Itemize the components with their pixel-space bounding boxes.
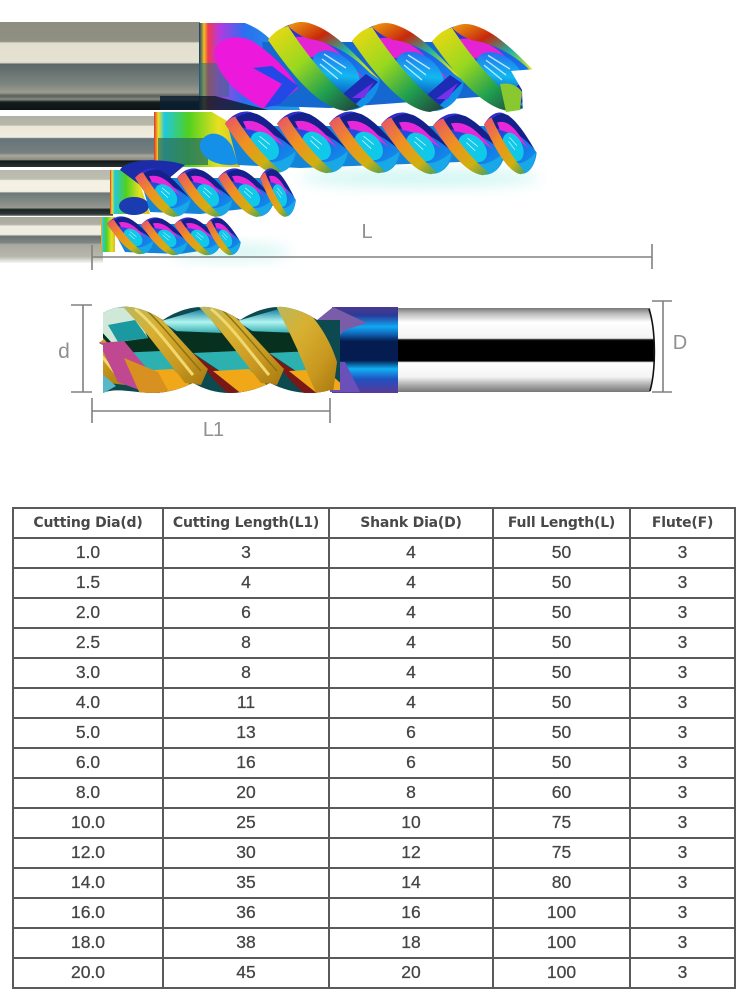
table row 2.0: 50 <box>552 602 571 622</box>
table row 1.5: 4 <box>241 572 251 592</box>
table row 14.0: 35 <box>236 872 256 892</box>
dimension L1: L1 <box>203 419 224 441</box>
tool 3: small end mill <box>0 160 296 217</box>
table row 3.0: 8 <box>241 662 251 682</box>
table row 5.0: 6 <box>406 722 416 742</box>
table row 2.5: 4 <box>406 632 416 652</box>
table row 5.0 <box>76 722 687 742</box>
table row 5.0: 5.0 <box>76 722 100 742</box>
table row 4.0 <box>76 692 687 712</box>
table row 5.0: 13 <box>236 722 256 742</box>
table header: Full Length(L) <box>508 515 615 531</box>
table row 14.0: 14.0 <box>71 872 105 892</box>
table header: Shank Dia(D) <box>360 515 462 531</box>
table row 16.0: 3 <box>678 902 687 922</box>
table row 16.0 <box>71 902 687 922</box>
table row 1.5: 1.5 <box>76 572 100 592</box>
table row 12.0: 30 <box>236 842 256 862</box>
table row 6.0 <box>76 752 687 772</box>
table row 18.0: 3 <box>678 932 687 952</box>
table row 2.0: 4 <box>406 602 416 622</box>
table row 20.0: 100 <box>547 962 576 982</box>
table row 6.0: 50 <box>552 752 571 772</box>
dimension L: L <box>361 221 373 243</box>
table row 2.5: 8 <box>241 632 251 652</box>
table header: Cutting Length(L1) <box>173 515 319 531</box>
lower end mill diagram <box>99 306 656 393</box>
table row 12.0 <box>71 842 687 862</box>
table row 6.0: 6 <box>406 752 416 772</box>
dimension d <box>58 305 92 392</box>
table row 3.0 <box>76 662 687 682</box>
table row 1.0: 3 <box>678 542 687 562</box>
table row 12.0: 75 <box>552 842 571 862</box>
table row 1.0: 4 <box>406 542 416 562</box>
table row 12.0: 12.0 <box>71 842 105 862</box>
table header <box>33 515 713 982</box>
table row 2.0: 2.0 <box>76 602 100 622</box>
table row 14.0: 3 <box>678 872 687 892</box>
table row 20.0: 20.0 <box>71 962 105 982</box>
table row 4.0: 4 <box>406 692 416 712</box>
table row 12.0: 3 <box>678 842 687 862</box>
table row 1.0: 1.0 <box>76 542 100 562</box>
dimension D <box>652 301 687 392</box>
table row 1.0: 50 <box>552 542 571 562</box>
table row 4.0: 50 <box>552 692 571 712</box>
table row 16.0: 100 <box>547 902 576 922</box>
table row 10.0 <box>71 812 687 832</box>
table row 8.0: 8.0 <box>76 782 100 802</box>
table row 18.0: 100 <box>547 932 576 952</box>
table row 8.0: 8 <box>406 782 416 802</box>
table row 2.5: 3 <box>678 632 687 652</box>
table row 1.5 <box>76 572 687 592</box>
table row 10.0: 10.0 <box>71 812 105 832</box>
table row 10.0: 25 <box>236 812 256 832</box>
tip <box>99 307 170 394</box>
table row 1.5: 3 <box>678 572 687 592</box>
table header: Flute(F) <box>652 515 713 531</box>
table row 3.0: 4 <box>406 662 416 682</box>
tool 4: smallest end mill <box>0 216 241 263</box>
table row 4.0: 3 <box>678 692 687 712</box>
table row 18.0: 18.0 <box>71 932 105 952</box>
table row 18.0: 18 <box>401 932 421 952</box>
table row 14.0 <box>71 872 687 892</box>
table row 8.0: 3 <box>678 782 687 802</box>
table row 20.0: 3 <box>678 962 687 982</box>
table row 3.0: 3 <box>678 662 687 682</box>
table row 16.0: 16.0 <box>71 902 105 922</box>
dimension L1 <box>92 398 330 441</box>
table row 16.0: 16 <box>401 902 421 922</box>
table row 1.0: 3 <box>241 542 251 562</box>
table row 18.0 <box>71 932 687 952</box>
table row 2.0: 6 <box>241 602 251 622</box>
table row 8.0 <box>76 782 687 802</box>
table row 10.0: 3 <box>678 812 687 832</box>
table row 5.0: 3 <box>678 722 687 742</box>
tool 1: largest end mill <box>0 22 548 114</box>
table row 8.0: 20 <box>236 782 256 802</box>
tool 2: medium end mill <box>0 112 537 175</box>
table header: Cutting Dia(d) <box>33 515 143 531</box>
table row 6.0: 16 <box>236 752 256 772</box>
table row 3.0: 3.0 <box>76 662 100 682</box>
table row 14.0: 14 <box>401 872 421 892</box>
dimension D: D <box>673 332 687 354</box>
table row 8.0: 60 <box>552 782 571 802</box>
table row 12.0: 12 <box>401 842 421 862</box>
table row 1.5: 50 <box>552 572 571 592</box>
table row 20.0: 20 <box>401 962 421 982</box>
table row 2.0: 3 <box>678 602 687 622</box>
flutes and tip <box>99 306 340 393</box>
photo: four rainbow coated end mills <box>0 22 548 263</box>
table row 10.0: 10 <box>401 812 421 832</box>
table row 3.0: 50 <box>552 662 571 682</box>
table row 18.0: 38 <box>236 932 256 952</box>
table row 20.0 <box>71 962 687 982</box>
table row 1.5: 4 <box>406 572 416 592</box>
table row 5.0: 50 <box>552 722 571 742</box>
table row 4.0: 11 <box>237 692 255 712</box>
table row 6.0: 3 <box>678 752 687 772</box>
table row 16.0: 36 <box>236 902 256 922</box>
table row 2.0 <box>76 602 687 622</box>
table row 14.0: 80 <box>552 872 571 892</box>
table row 1.0 <box>76 542 687 562</box>
table row 2.5: 2.5 <box>76 632 100 652</box>
table row 4.0: 4.0 <box>76 692 100 712</box>
specification table <box>12 507 736 989</box>
table row 10.0: 75 <box>552 812 571 832</box>
table row 20.0: 45 <box>236 962 256 982</box>
coated neck <box>317 307 398 393</box>
table row 2.5 <box>76 632 687 652</box>
dimension d: d <box>58 340 70 363</box>
shank <box>397 308 654 392</box>
table row 2.5: 50 <box>552 632 571 652</box>
tool 1 tip notch <box>511 68 548 114</box>
dimension L <box>92 221 652 270</box>
table row 6.0: 6.0 <box>76 752 100 772</box>
